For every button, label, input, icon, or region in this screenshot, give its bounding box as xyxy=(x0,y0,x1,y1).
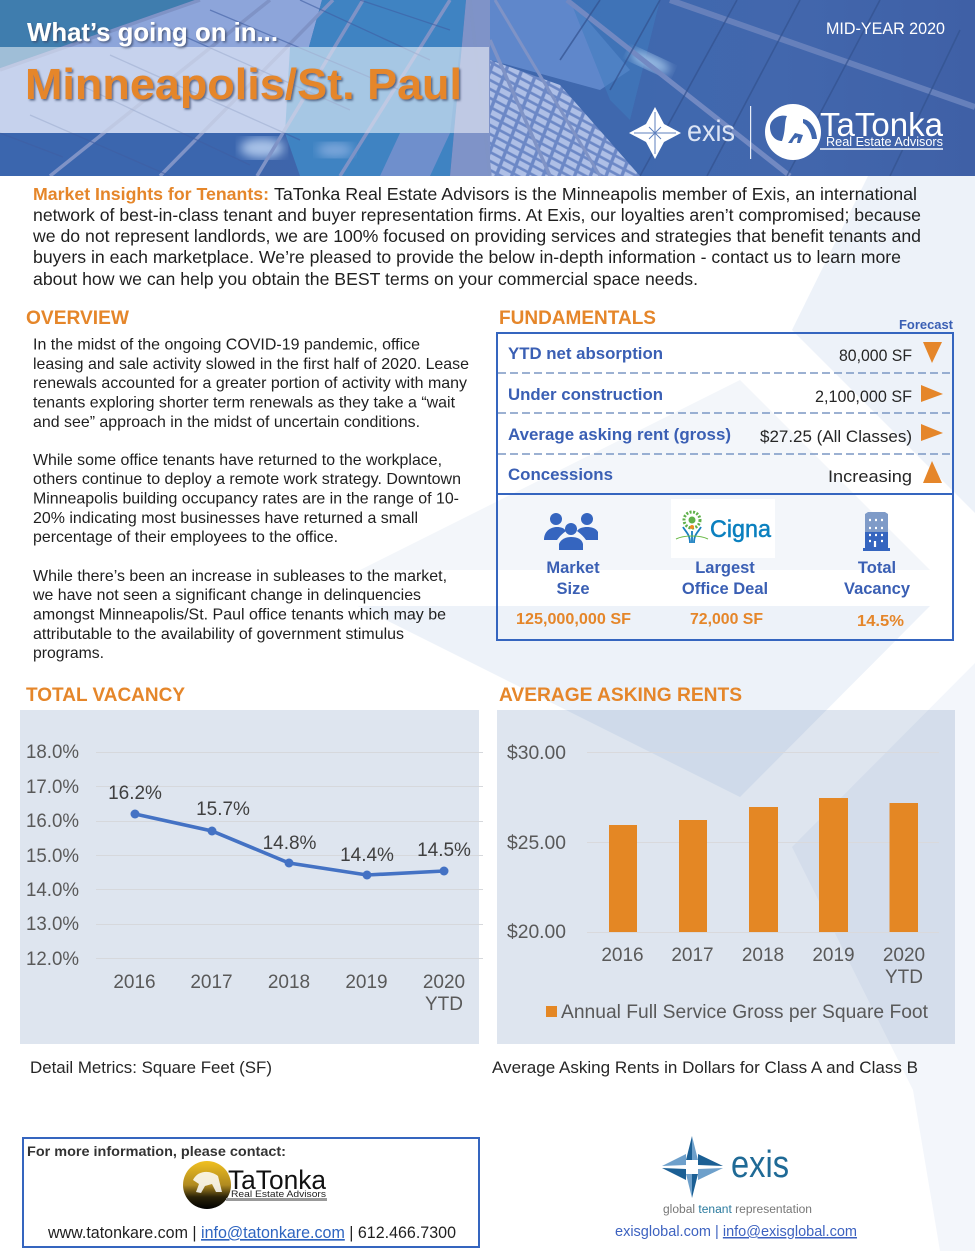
overview text: renewals accounted for a greater portion of activity with many xyxy=(33,375,467,392)
x axis labels: YTD xyxy=(425,994,463,1015)
largest office deal stat xyxy=(682,559,768,628)
row: under construction xyxy=(508,385,943,406)
x axis labels: 2020 xyxy=(423,972,465,993)
edition label: MID-YEAR 2020 xyxy=(826,19,945,38)
row: under construction: Under construction xyxy=(508,386,663,404)
data labels xyxy=(108,783,471,866)
total vacancy stat: 14.5% xyxy=(857,613,904,630)
logo divider xyxy=(750,106,751,159)
legend: Annual Full Service Gross per Square Foot xyxy=(561,1002,929,1023)
x axis labels xyxy=(601,945,925,988)
data labels: 15.7% xyxy=(196,799,250,820)
overview text: amongst Minneapolis/St. Paul office tenants which may be xyxy=(33,606,446,624)
panel: contact: For more information, please contact: xyxy=(27,1144,286,1159)
intro text: Market Insights for Tenants: xyxy=(33,184,269,204)
data line xyxy=(130,810,448,880)
y axis labels: 12.0% xyxy=(26,949,79,970)
fundamentals heading: FUNDAMENTALS xyxy=(499,307,656,329)
total vacancy heading: TOTAL VACANCY xyxy=(26,684,185,706)
exis logo footer: global tenant representation xyxy=(663,1204,812,1216)
overview text: In the midst of the ongoing COVID-19 pandemic, office xyxy=(33,336,420,354)
row: concessions: Increasing xyxy=(828,468,912,486)
average asking rents heading: AVERAGE ASKING RENTS xyxy=(499,684,742,706)
panel: contact xyxy=(23,1138,479,1247)
overview text: percentage of their employees to the office. xyxy=(33,529,338,546)
line chart: total vacancy xyxy=(20,710,483,1044)
y axis labels: 13.0% xyxy=(26,914,79,935)
y axis labels: 17.0% xyxy=(26,777,79,798)
header banner xyxy=(0,0,975,176)
largest office deal stat: Largest xyxy=(695,559,755,577)
row: under construction: 2,100,000 SF xyxy=(815,388,912,406)
exis contact links: exisglobal.com | info@exisglobal.com xyxy=(615,1223,857,1240)
header title band xyxy=(0,47,489,133)
y axis labels: $30.00 xyxy=(507,743,566,764)
x axis labels: 2018 xyxy=(268,972,310,993)
overview text: Minneapolis building occupancy rates are in the range of 10- xyxy=(33,490,459,508)
overview text: and see” approach in the midst of uncertain conditions. xyxy=(33,414,420,431)
caption: rents chart: Average Asking Rents in Dollars for Class A and Class B xyxy=(492,1058,918,1077)
row: YTD net absorption xyxy=(508,342,942,365)
overview text: we have not seen a significant change in delinquencies xyxy=(32,587,421,604)
y axis labels: 15.0% xyxy=(26,846,79,867)
row: average asking rent: $27.25 (All Classes) xyxy=(760,428,912,446)
largest office deal stat: 72,000 SF xyxy=(690,611,763,628)
intro text: buyers in each marketplace. We’re pleased to provide the below in-depth information - contact us to learn more xyxy=(33,247,901,267)
x axis labels: 2020 xyxy=(883,945,925,966)
overview text: tenants exploring shorter term renewals as they take a “wait xyxy=(33,394,456,412)
caption: vacancy chart: Detail Metrics: Square Feet (SF) xyxy=(30,1058,272,1077)
y axis labels xyxy=(507,743,566,943)
exis logo: exis xyxy=(687,115,735,148)
exis logo footer: exis xyxy=(731,1144,789,1186)
TaTonka logo dark: Real Estate Advisors xyxy=(231,1189,326,1200)
TaTonka logo white xyxy=(765,104,944,160)
panel: fundamentals xyxy=(497,333,953,640)
x axis labels: 2016 xyxy=(113,972,156,993)
y axis labels: $25.00 xyxy=(507,833,566,854)
row: average asking rent: Average asking rent (gross) xyxy=(508,426,731,444)
x axis labels: YTD xyxy=(885,967,923,988)
exis logo footer xyxy=(662,1136,812,1216)
row: concessions: Concessions xyxy=(508,466,613,484)
x axis labels xyxy=(113,972,465,1015)
overview text xyxy=(32,336,469,662)
intro text: network of best-in-class tenant and buyer representation firms. At Exis, our loyalties aren’t compromised; because xyxy=(33,205,921,225)
x axis labels: 2019 xyxy=(345,972,388,993)
TaTonka logo dark: TaTonka xyxy=(228,1165,327,1195)
main title: Minneapolis/St. Paul xyxy=(25,60,462,109)
market size stat: 125,000,000 SF xyxy=(516,611,631,628)
overview text: others continue to deploy a remote work strategy. Downtown xyxy=(33,471,461,488)
row: YTD net absorption: YTD net absorption xyxy=(508,345,663,363)
TaTonka logo dark xyxy=(183,1161,327,1209)
x axis labels: 2018 xyxy=(742,945,784,966)
bar chart: average asking rents xyxy=(497,710,955,1044)
market size stat: Size xyxy=(556,580,590,598)
total vacancy stat: Total xyxy=(858,559,896,577)
y axis labels: 14.0% xyxy=(26,880,79,901)
x axis labels: 2017 xyxy=(671,945,714,966)
market size stat xyxy=(516,559,631,628)
data labels: 14.5% xyxy=(417,840,471,861)
forecast label: Forecast xyxy=(899,318,954,332)
exis logo xyxy=(629,107,735,159)
icon: Cigna logo: Cigna xyxy=(710,516,772,543)
overview text: leasing and sale activity slowed in the first half of 2020. Lease xyxy=(33,356,469,373)
total vacancy stat: Vacancy xyxy=(844,580,911,598)
header kicker: What’s going on in... xyxy=(27,17,278,47)
y axis labels: 18.0% xyxy=(26,742,79,763)
data labels: 14.8% xyxy=(263,833,317,854)
TaTonka logo white: Real Estate Advisors xyxy=(826,135,943,149)
intro text: we do not represent landlords, we are 100% focused on providing services and strategies that benefit tenants and xyxy=(32,226,921,246)
y axis labels: $20.00 xyxy=(507,922,566,943)
icon: building xyxy=(863,512,890,551)
TaTonka logo white: TaTonka xyxy=(820,106,944,143)
overview text: programs. xyxy=(33,645,104,662)
background geometric shapes xyxy=(358,176,975,1251)
market size stat: Market xyxy=(546,559,600,577)
data labels: 16.2% xyxy=(108,783,162,804)
overview text: attributable to the availability of government stimulus xyxy=(33,626,404,643)
overview text: While there’s been an increase in subleases to the market, xyxy=(33,568,447,585)
x axis labels: 2019 xyxy=(812,945,855,966)
total vacancy stat xyxy=(844,559,911,630)
row: concessions xyxy=(508,461,942,486)
contact details: www.tatonkare.com | info@tatonkare.com | 612.466.7300 xyxy=(47,1224,456,1242)
row: YTD net absorption: 80,000 SF xyxy=(839,347,912,365)
bars xyxy=(609,798,918,932)
row: average asking rent xyxy=(508,424,943,446)
overview text: 20% indicating most businesses have returned a small xyxy=(33,510,418,527)
overview heading: OVERVIEW xyxy=(26,307,130,329)
y axis labels: 16.0% xyxy=(26,811,79,832)
x axis labels: 2016 xyxy=(601,945,644,966)
x axis labels: 2017 xyxy=(190,972,233,993)
data labels: 14.4% xyxy=(340,845,394,866)
intro text: TaTonka Real Estate Advisors is the Minneapolis member of Exis, an international xyxy=(274,184,917,204)
overview text: While some office tenants have returned to the workplace, xyxy=(33,452,442,469)
largest office deal stat: Office Deal xyxy=(682,580,768,598)
intro text xyxy=(32,184,921,289)
intro text: about how we can help you obtain the BEST terms on your commercial space needs. xyxy=(33,269,698,289)
icon: Cigna logo xyxy=(671,499,775,558)
y axis labels xyxy=(26,742,79,970)
icon: people xyxy=(544,513,598,550)
